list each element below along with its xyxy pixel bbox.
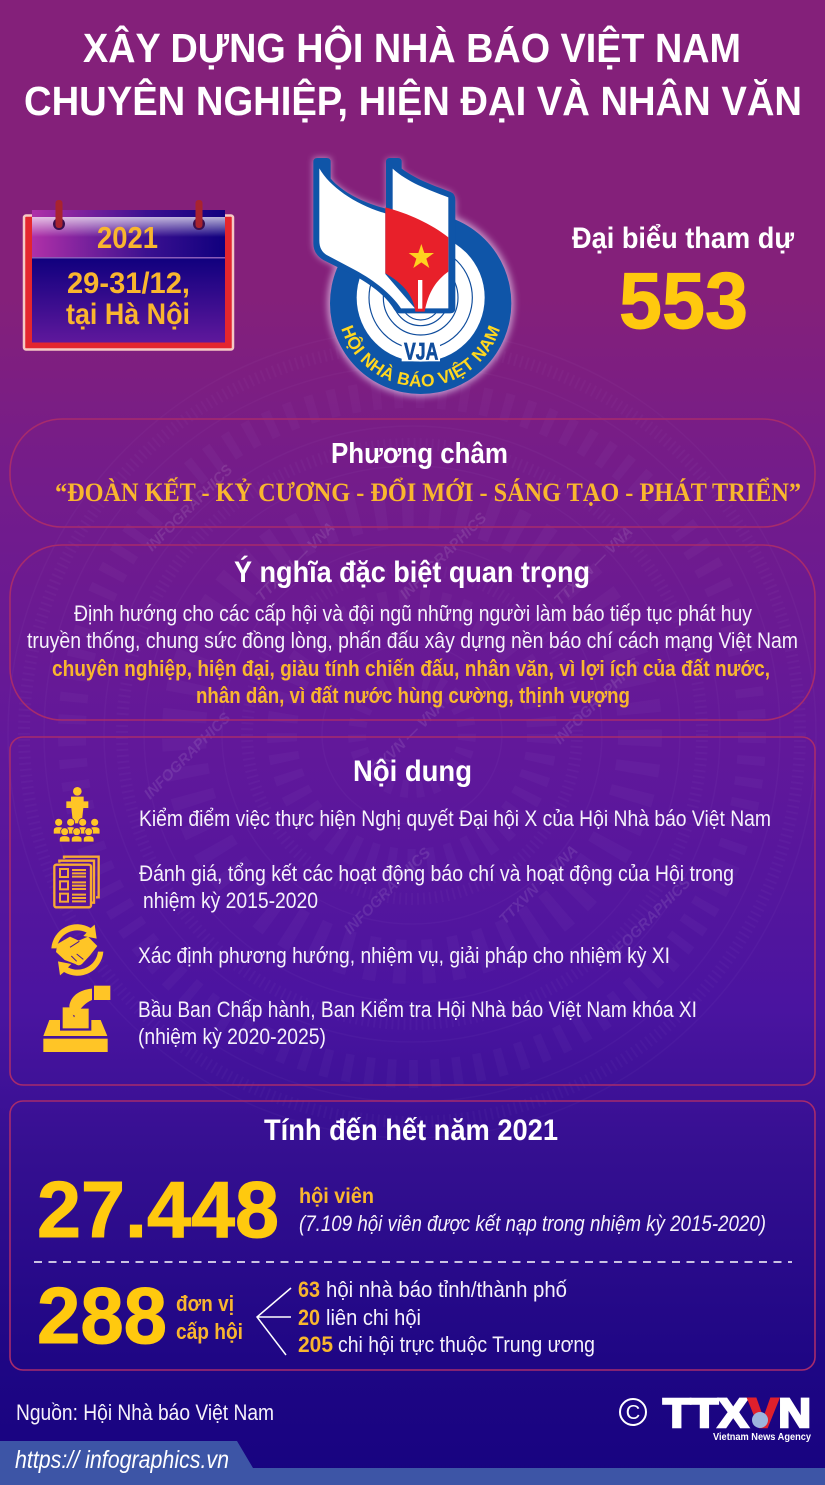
watermark: agency text: TTXVN — VNA: [551, 523, 637, 609]
text: election: [138, 997, 697, 1049]
title: [24, 25, 802, 124]
source: Nguồn: Hội Nhà báo Việt Nam: [16, 1400, 274, 1425]
icon: speaker and audience: [53, 787, 100, 842]
calendar: [24, 200, 233, 350]
watermark: agency text: TTXVN — VNA: [253, 519, 339, 605]
stat: association units: đơn vị: [176, 1291, 234, 1316]
watermark: agency text: INFOGRAPHICS: [141, 709, 234, 803]
watermark: agency text: [141, 461, 694, 968]
footer band with website: https:// infographics.vn: [15, 1446, 229, 1474]
stat: association units: 20: [298, 1305, 320, 1330]
text: election: (nhiệm kỳ 2020-2025): [138, 1024, 326, 1049]
copyright and agency logo: Vietnam News Agency: [713, 1432, 811, 1443]
panel: significance: [10, 545, 815, 720]
icon: ballot box: [43, 986, 110, 1052]
text: assessment: Đánh giá, tổng kết các hoạt động báo chí và hoạt động của Hội trong: [139, 861, 734, 886]
stat: members: hội viên: [299, 1185, 374, 1208]
title: XÂY DỰNG HỘI NHÀ BÁO VIỆT NAM: [83, 25, 741, 71]
watermark: bronze drum pattern: [8, 330, 816, 1138]
text: assessment: nhiệm kỳ 2015-2020: [143, 888, 318, 913]
stat: association units: cấp hội: [176, 1319, 243, 1344]
panel: motto: [10, 419, 815, 527]
icon: journalists association logo: [308, 154, 518, 402]
stat: association units: chi hội trực thuộc Trung ương: [338, 1332, 595, 1357]
stat: association units: [37, 1271, 595, 1360]
watermark: agency text: INFOGRAPHICS: [397, 509, 490, 603]
stat: members: [37, 1165, 766, 1254]
watermark: agency text: TTXVN — VNA: [496, 842, 582, 928]
text: election: Bầu Ban Chấp hành, Ban Kiểm tra Hội Nhà báo Việt Nam khóa XI: [138, 997, 697, 1022]
stat: association units: hội nhà báo tỉnh/thành phố: [326, 1277, 567, 1302]
stat: members: 27.448: [37, 1165, 279, 1254]
delegates stat: 553: [619, 256, 748, 345]
calendar: tại Hà Nội: [66, 298, 190, 331]
text: assessment: [139, 861, 734, 913]
copyright and agency logo: C: [626, 1402, 640, 1424]
icon: journalists association logo: VJA: [404, 338, 438, 365]
panel: figures to end of 2021: [10, 1101, 815, 1370]
icon: handshake with arrows: [51, 924, 103, 976]
icon: documents checklist: [54, 857, 99, 907]
footer band with website: [0, 1441, 825, 1485]
panel: content: Nội dung: [353, 755, 472, 788]
delegates stat: [572, 222, 794, 345]
watermark: agency text: TTXVN — VNA: [363, 697, 449, 783]
panel: content: [10, 737, 815, 1085]
delegates stat: Đại biểu tham dự: [572, 222, 794, 255]
text: direction: Xác định phương hướng, nhiệm vụ, giải pháp cho nhiệm kỳ XI: [138, 943, 670, 968]
stat: association units: 288: [37, 1271, 167, 1360]
copyright and agency logo: TTXVN: [663, 1390, 811, 1436]
watermark: agency text: INFOGRAPHICS: [601, 874, 694, 968]
calendar: 29-31/12,: [67, 267, 190, 300]
watermark: agency text: INFOGRAPHICS: [341, 844, 434, 938]
panel: significance: Định hướng cho các cấp hội và đội ngũ những người làm báo tiếp tục phát huy: [74, 601, 752, 626]
stat: association units: 63: [298, 1277, 320, 1302]
watermark: agency text: INFOGRAPHICS: [143, 461, 236, 555]
icon: journalists association logo: HỘI NHÀ BÁO VIỆT NAM: [342, 325, 500, 387]
stat: association units: 205: [298, 1332, 333, 1357]
panel: significance: nhân dân, vì đất nước hùng cường, thịnh vượng: [196, 683, 630, 708]
panel: significance: Ý nghĩa đặc biệt quan trọng: [234, 555, 590, 589]
copyright and agency logo: [620, 1390, 811, 1443]
panel: motto: Phương châm: [331, 438, 508, 470]
stat: association units: liên chi hội: [326, 1305, 421, 1330]
panel: figures to end of 2021: Tính đến hết năm 2021: [264, 1114, 558, 1147]
calendar: 2021: [97, 220, 158, 255]
watermark: agency text: INFOGRAPHICS: [551, 654, 644, 748]
